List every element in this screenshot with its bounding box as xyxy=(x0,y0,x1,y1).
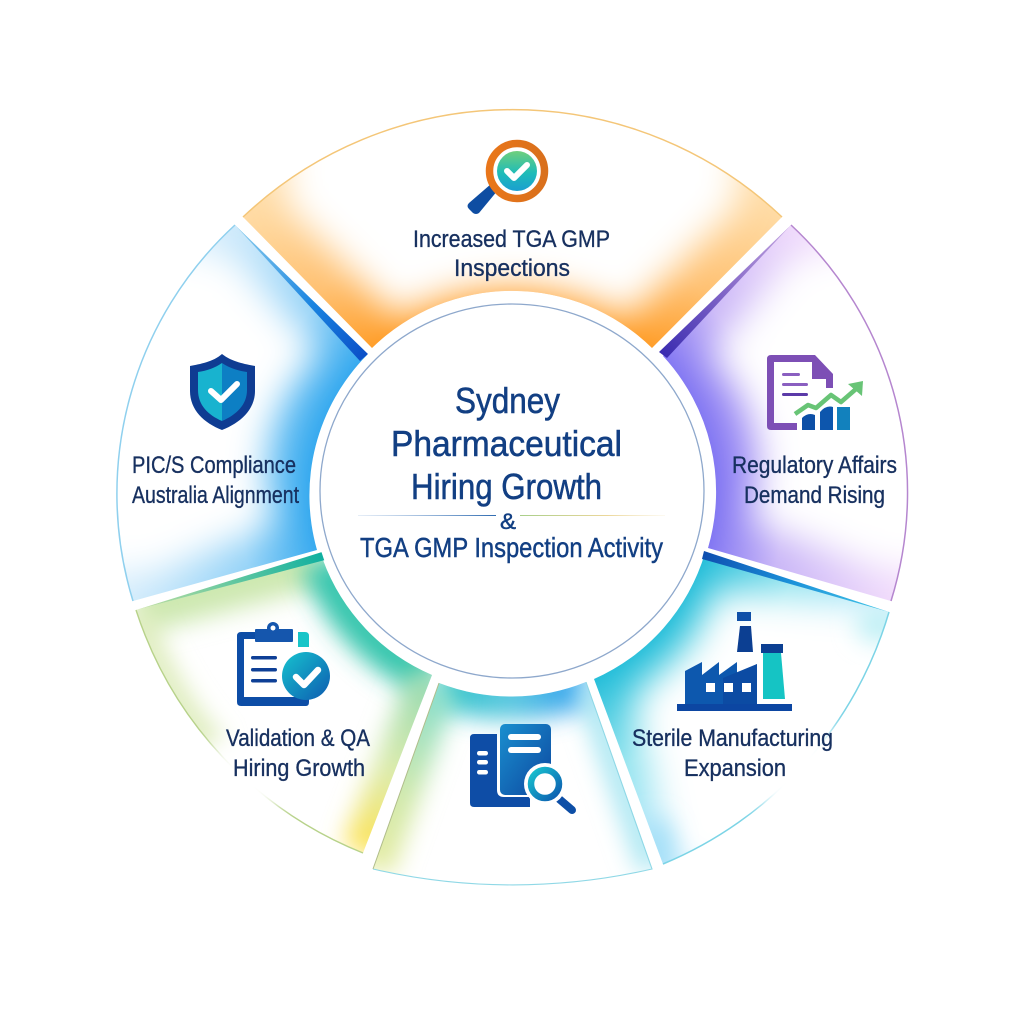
label: sterile manufacturing expansion: Sterile Manufacturing xyxy=(632,725,833,752)
divider left xyxy=(358,515,496,516)
central subtitle: TGA GMP Inspection Activity xyxy=(360,532,663,563)
divider right xyxy=(520,515,665,516)
panel: sterile manufacturing expansion xyxy=(594,551,890,865)
accent band xyxy=(702,551,889,612)
accent band xyxy=(235,225,368,361)
accent band xyxy=(136,552,325,610)
label: validation and QA hiring growth: Validation & QA xyxy=(226,725,370,752)
label: PIC/S compliance Australia alignment: Australia Alignment xyxy=(132,482,299,509)
panel: regulatory affairs demand rising xyxy=(659,224,908,602)
label: validation and QA hiring growth: Hiring Growth xyxy=(233,755,365,782)
label: sterile manufacturing expansion xyxy=(632,725,833,782)
label: increased TGA GMP inspections: Increased TGA GMP xyxy=(413,226,610,253)
label: validation and QA hiring growth xyxy=(226,725,370,782)
label: increased TGA GMP inspections xyxy=(413,226,610,282)
ampersand: & xyxy=(500,509,516,534)
panel: validation and QA hiring growth xyxy=(135,552,432,854)
edge line xyxy=(373,683,439,869)
central title xyxy=(391,380,622,507)
panel: PIC/S compliance Australia alignment xyxy=(116,224,368,602)
icon: factory xyxy=(677,612,792,711)
icon: clipboard with check xyxy=(237,622,330,706)
label: regulatory affairs demand rising xyxy=(732,452,897,509)
white fade over rim xyxy=(748,729,872,821)
central title: Pharmaceutical xyxy=(391,423,622,464)
icon: report with growth chart xyxy=(767,355,863,430)
icon: magnifier with check xyxy=(468,144,544,214)
icon: documents with magnifier xyxy=(470,724,572,810)
accent band xyxy=(659,225,791,358)
label: PIC/S compliance Australia alignment: PIC/S Compliance xyxy=(132,452,296,479)
panel: document review xyxy=(372,682,653,886)
label: increased TGA GMP inspections: Inspections xyxy=(454,255,570,282)
label: regulatory affairs demand rising: Regulatory Affairs xyxy=(732,452,897,479)
central title: Sydney xyxy=(455,380,560,421)
icon: shield with check xyxy=(190,354,255,430)
label: PIC/S compliance Australia alignment xyxy=(132,452,299,509)
central title: Hiring Growth xyxy=(411,466,602,507)
central circle xyxy=(312,294,712,690)
white fade over rim xyxy=(187,743,283,827)
panel: increased TGA GMP inspections xyxy=(242,108,782,348)
label: regulatory affairs demand rising: Demand Rising xyxy=(744,482,885,509)
label: sterile manufacturing expansion: Expansion xyxy=(684,755,786,782)
